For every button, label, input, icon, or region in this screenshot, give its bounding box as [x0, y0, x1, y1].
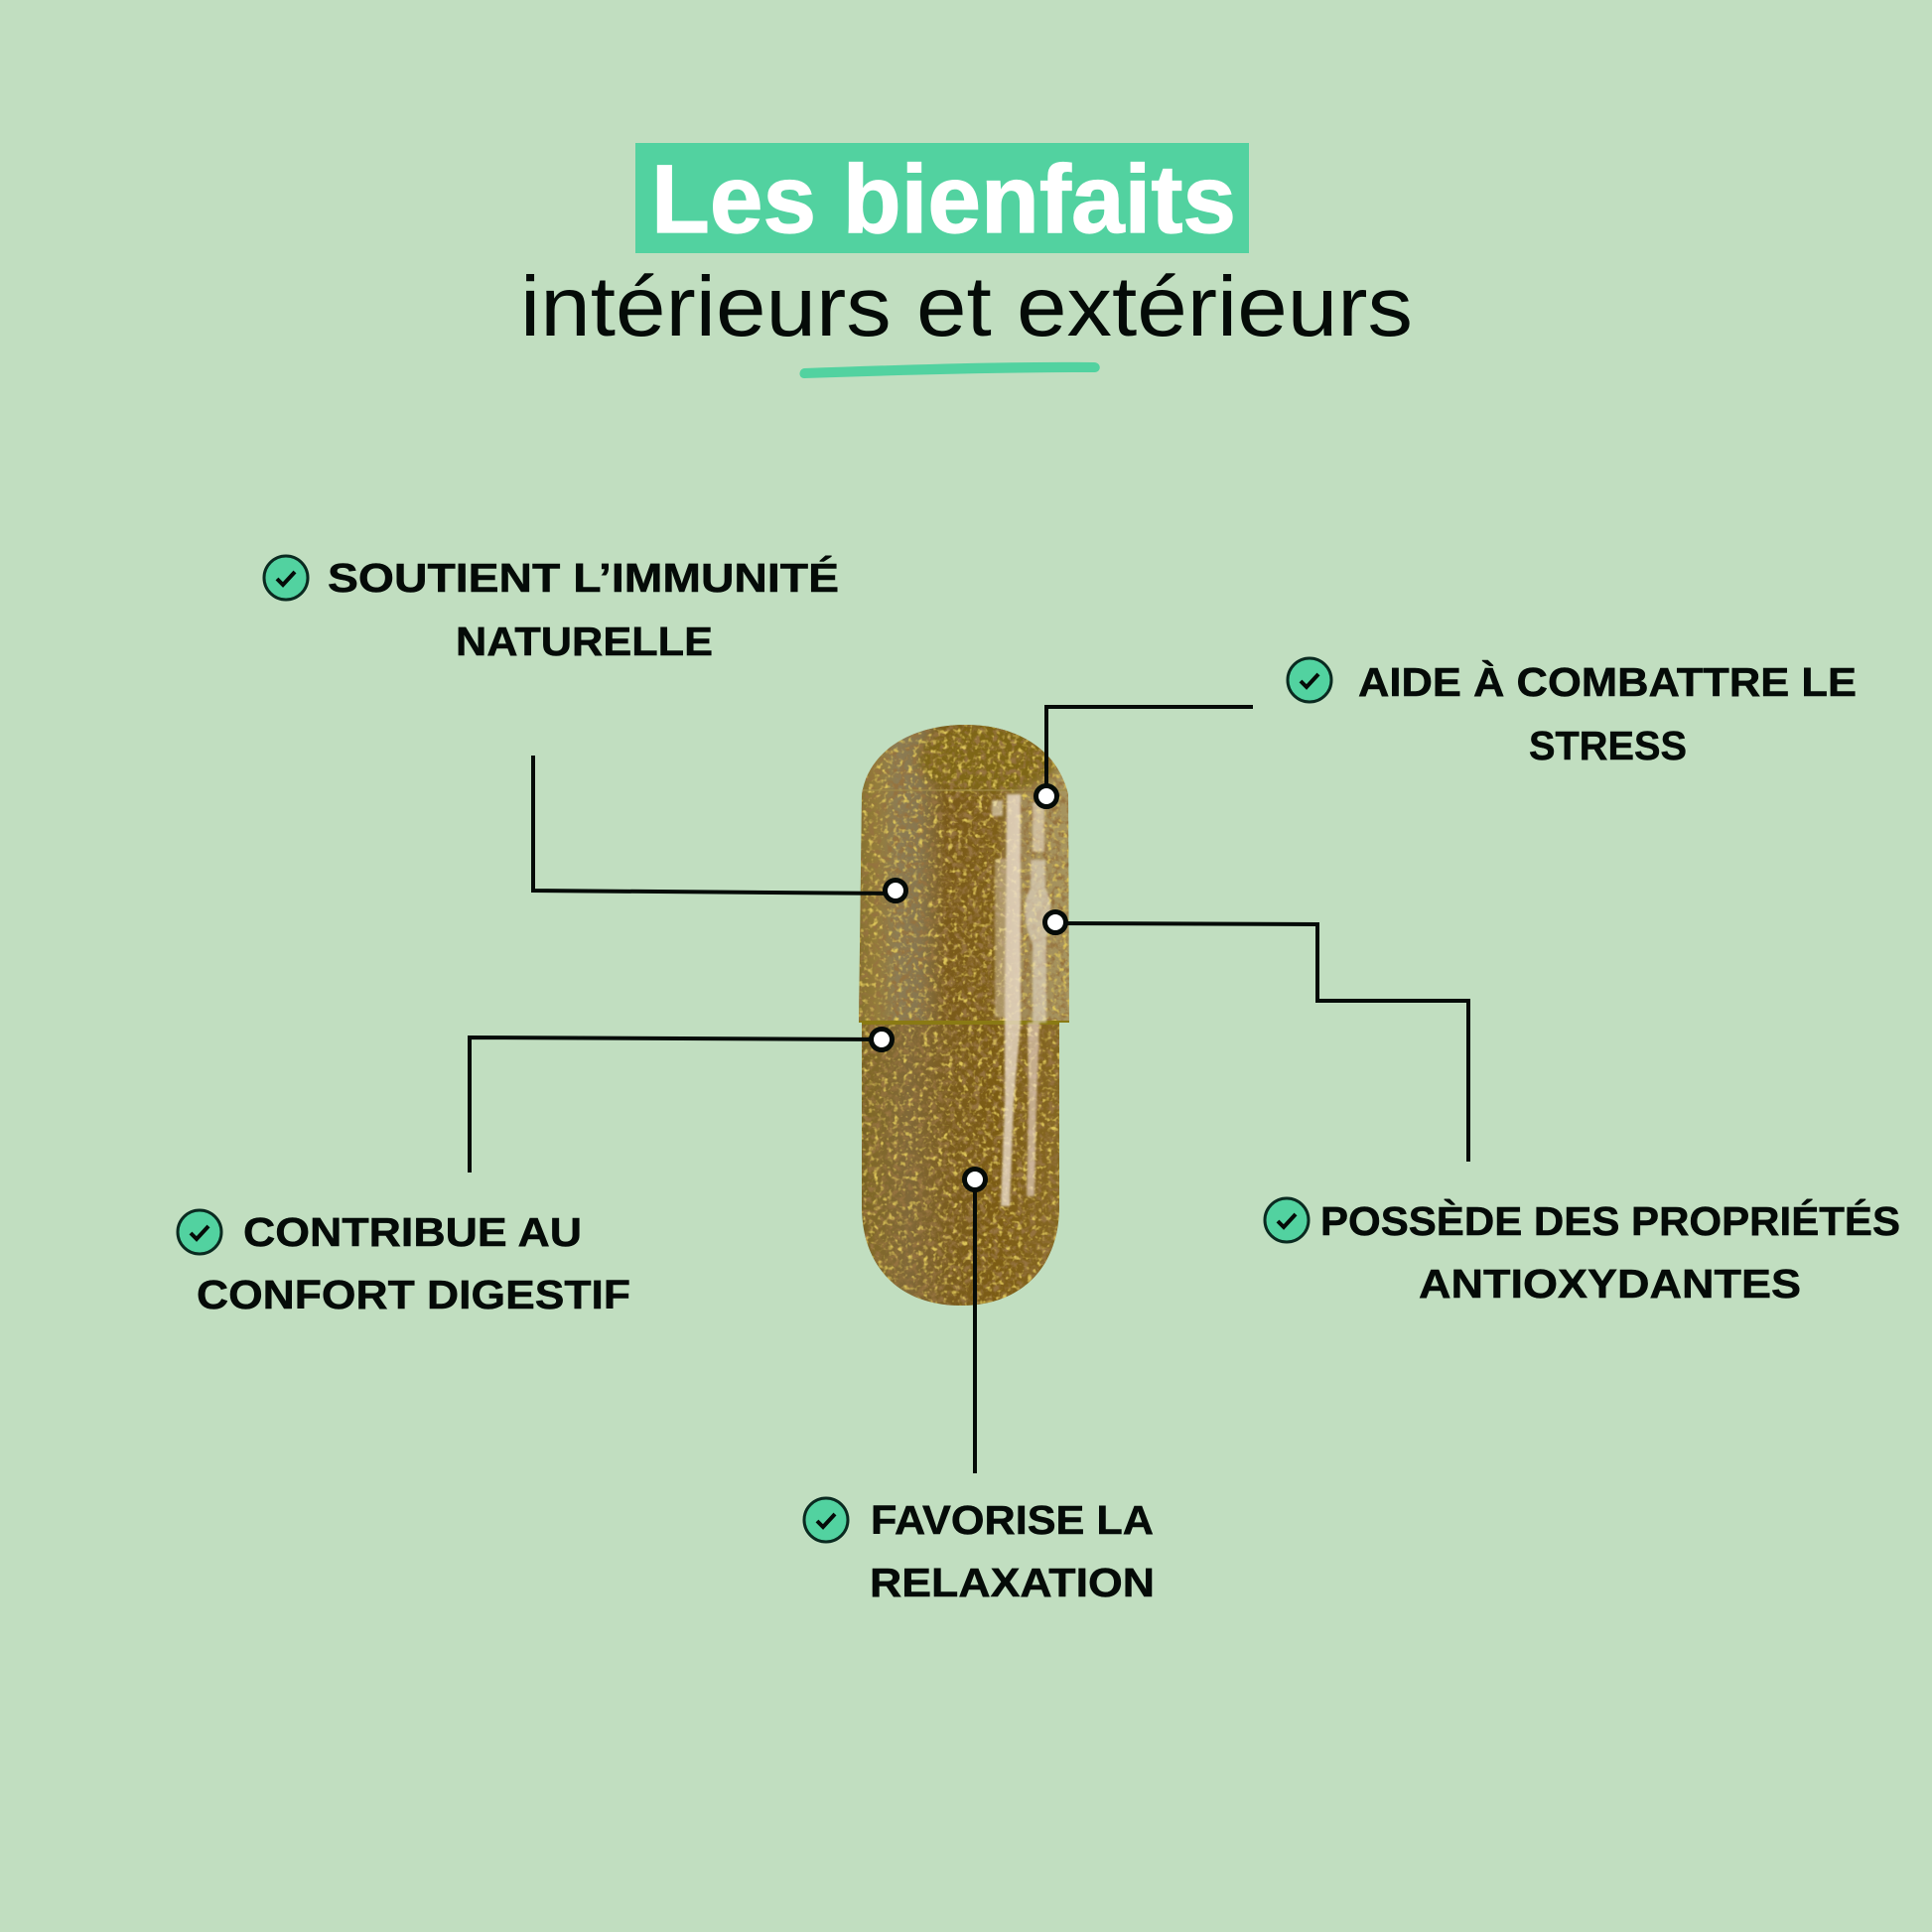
side highlight: [995, 859, 1006, 1018]
label: favorise la relaxation: FAVORISE LA: [871, 1497, 1154, 1543]
dome powder: [918, 726, 1057, 793]
capsule lower body: [862, 1025, 1059, 1306]
upper shell band edge: [859, 789, 1069, 791]
bulb highlight: [1025, 860, 1050, 1023]
icon: check: [1288, 658, 1331, 702]
heading: Les bienfaits: Les bienfaits: [651, 145, 1236, 253]
title: [520, 143, 1413, 378]
icon: check: [264, 556, 308, 600]
label: possède des propriétés antioxydantes: [1265, 1198, 1900, 1307]
label: aide à combattre le stress: [1288, 658, 1857, 768]
small window highlight: [1033, 802, 1044, 852]
capsule dome and upper shell: [854, 720, 1074, 1028]
connector: relaxation: [973, 1178, 977, 1473]
label: favorise la relaxation: RELAXATION: [870, 1560, 1155, 1605]
heading: intérieurs et extérieurs: intérieurs et extérieurs: [520, 260, 1413, 354]
long highlight left: [1001, 794, 1021, 1206]
powder speckle light: [854, 720, 1074, 1311]
marker: antioxydantes: [1044, 911, 1066, 933]
brush underline: [800, 362, 1100, 378]
capsule seam: [856, 1021, 1070, 1025]
label: favorise la relaxation: [804, 1497, 1155, 1605]
label: aide à combattre le stress: AIDE À COMBATTRE LE: [1358, 659, 1857, 705]
marker: immunité: [886, 880, 905, 901]
label: contribue au confort digestif: [178, 1209, 630, 1317]
long highlight right: [1027, 1023, 1039, 1196]
title highlight box: [635, 143, 1249, 253]
label: soutient l'immunité naturelle: SOUTIENT L’IMMUNITÉ: [328, 555, 839, 601]
connector: antioxydantes: [1055, 923, 1468, 1162]
label: contribue au confort digestif: CONTRIBUE AU: [243, 1209, 582, 1255]
short highlight top: [992, 800, 1003, 816]
label: soutient l'immunité naturelle: NATURELLE: [456, 619, 713, 664]
capsule photo: [854, 720, 1074, 1311]
marker: relaxation: [965, 1170, 985, 1189]
label: soutient l'immunité naturelle: [264, 555, 839, 664]
connector: digestif: [470, 1037, 882, 1173]
label: contribue au confort digestif: CONFORT DIGESTIF: [197, 1272, 630, 1317]
label: aide à combattre le stress: STRESS: [1529, 723, 1687, 768]
connector: immunité: [533, 756, 896, 894]
highlights on capsule: [992, 794, 1050, 1206]
powder speckle dark: [854, 720, 1074, 1311]
marker: digestif: [872, 1029, 892, 1050]
label: possède des propriétés antioxydantes: POSSÈDE DES PROPRIÉTÉS: [1320, 1198, 1900, 1244]
icon: check: [178, 1210, 221, 1254]
icon: check: [804, 1498, 848, 1542]
label: possède des propriétés antioxydantes: ANTIOXYDANTES: [1419, 1261, 1801, 1307]
icon: check: [1265, 1198, 1309, 1242]
connector: stress: [1046, 707, 1253, 794]
marker: stress: [1036, 786, 1056, 806]
